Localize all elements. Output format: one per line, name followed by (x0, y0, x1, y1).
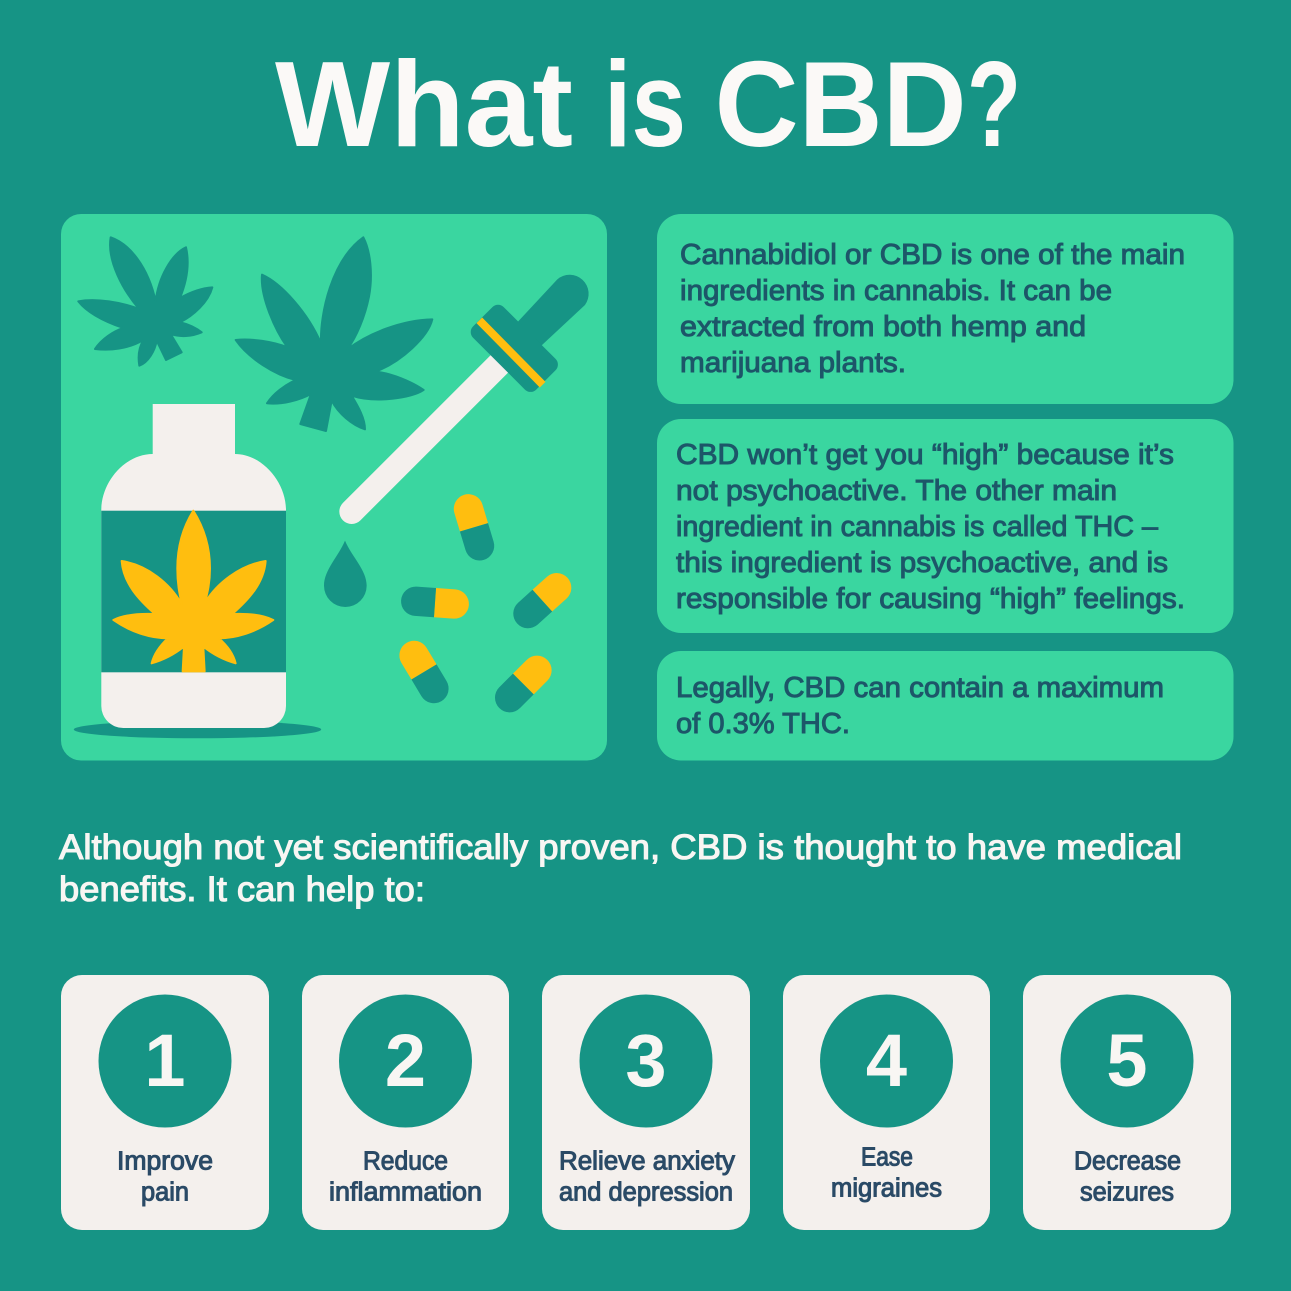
heading: medical benefits intro: benefits. It can help to: (59, 870, 425, 909)
heading: medical benefits intro: Although not yet scientifically proven, CBD is thought to have medical (59, 828, 1182, 867)
card 3: relieve anxiety and depression: 3 (625, 1019, 667, 1102)
card 4: ease migraines: migraines (831, 1174, 942, 1202)
card 1: improve pain: 1 (144, 1019, 186, 1102)
panel: legal limit (657, 651, 1234, 760)
panel: illustration (61, 214, 607, 760)
text block: definition: ingredients in cannabis. It can be (680, 275, 1112, 307)
text block: definition: Cannabidiol or CBD is one of the main (680, 239, 1185, 271)
card 1: improve pain (61, 975, 269, 1230)
icon: capsules (394, 491, 577, 718)
title: CBD (715, 36, 967, 172)
text block: THC explanation: ingredient in cannabis is called THC – (676, 511, 1158, 543)
text block: THC explanation: CBD won’t get you “high” because it’s (676, 439, 1174, 471)
card 5: decrease seizures: seizures (1080, 1178, 1174, 1206)
card 5: decrease seizures: 5 (1106, 1019, 1148, 1102)
text block: legal limit (676, 672, 1164, 740)
title: ? (967, 36, 1021, 172)
icon: yellow cannabis leaf on label (113, 511, 273, 671)
card 5: decrease seizures: Decrease (1074, 1148, 1181, 1176)
text block: legal limit: of 0.3% THC. (676, 708, 850, 740)
card 2: reduce inflammation (302, 975, 509, 1230)
text block: definition (680, 239, 1185, 379)
card 4: ease migraines: Ease (861, 1144, 913, 1172)
text block: definition: marijuana plants. (680, 347, 906, 379)
card 5: decrease seizures (1023, 975, 1231, 1230)
card 3: relieve anxiety and depression (542, 975, 750, 1230)
card 2: reduce inflammation: Reduce (363, 1148, 448, 1176)
card 4: ease migraines: 4 (866, 1019, 907, 1102)
panel: not psychoactive (657, 419, 1234, 633)
card 1: improve pain: Improve (117, 1148, 213, 1176)
icon: large cannabis leaf (236, 237, 432, 431)
card 3: relieve anxiety and depression: Relieve anxiety (559, 1148, 735, 1176)
text block: THC explanation: not psychoactive. The other main (676, 475, 1117, 507)
text block: definition: extracted from both hemp and (680, 311, 1086, 343)
card 4: ease migraines (783, 975, 990, 1230)
title: is (604, 36, 686, 172)
panel: what CBD is (657, 214, 1234, 404)
icon: bottle shadow (74, 721, 321, 738)
card 2: reduce inflammation: 2 (385, 1019, 426, 1102)
title: What (275, 36, 573, 172)
icon: dropper (352, 275, 589, 512)
text block: THC explanation: responsible for causing “high” feelings. (676, 583, 1185, 615)
icon: CBD oil bottle (101, 404, 286, 728)
heading: medical benefits intro (59, 828, 1182, 909)
icon: small cannabis leaf (78, 237, 212, 366)
text block: legal limit: Legally, CBD can contain a maximum (676, 672, 1164, 704)
card 2: reduce inflammation: inflammation (329, 1178, 482, 1206)
text block: THC explanation: this ingredient is psychoactive, and is (676, 547, 1168, 579)
card 1: improve pain: pain (141, 1178, 189, 1206)
card 3: relieve anxiety and depression: and depression (559, 1178, 733, 1206)
icon: oil drop (324, 541, 367, 607)
text block: THC explanation (676, 439, 1185, 615)
